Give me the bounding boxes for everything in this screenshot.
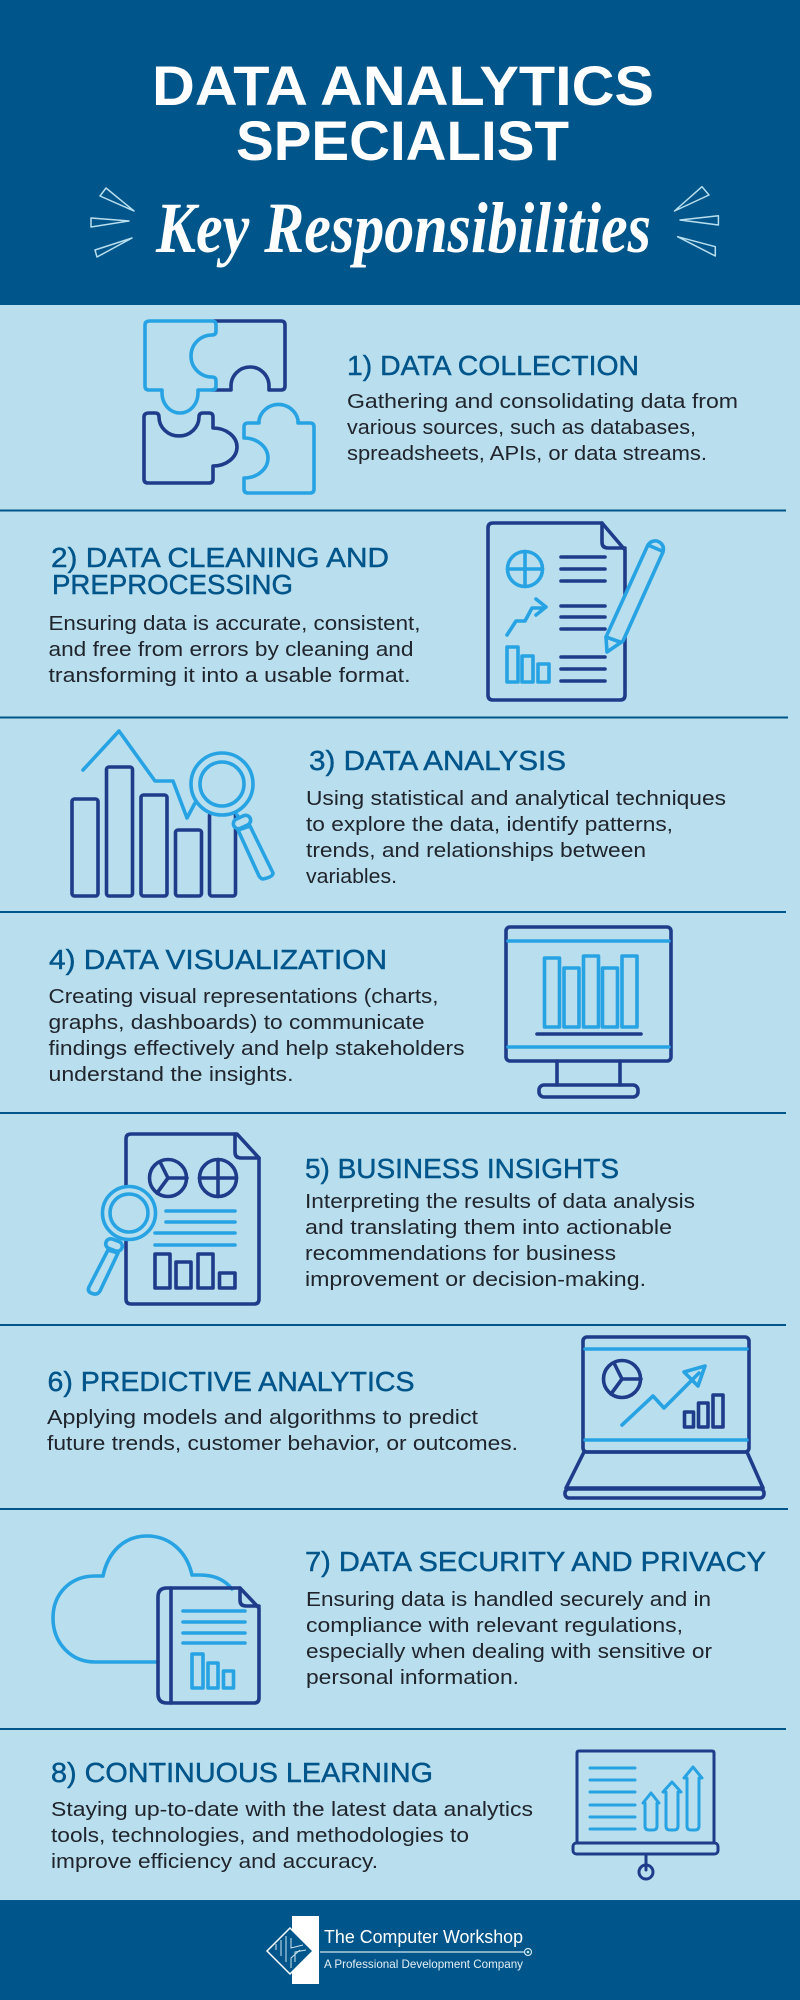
heading: 7) DATA SECURITY AND PRIVACY [305, 1546, 766, 1577]
icon: presentation board with rising arrows [573, 1751, 718, 1879]
heading [51, 542, 389, 600]
text block: future trends, customer behavior, or outcomes. [47, 1433, 518, 1455]
text block: recommendations for business [305, 1243, 616, 1265]
text block: transforming it into a usable format. [48, 665, 410, 687]
heading: 2) DATA CLEANING AND [51, 542, 389, 573]
panel: 8 continuous learning [0, 1728, 800, 1900]
panel: 4 data visualization [0, 911, 800, 1113]
panel: 6 predictive analytics [0, 1324, 800, 1509]
text block: graphs, dashboards) to communicate [48, 1012, 425, 1034]
text block [306, 1589, 712, 1689]
text block: especially when dealing with sensitive or [306, 1641, 712, 1663]
heading: 6) PREDICTIVE ANALYTICS [48, 1366, 414, 1397]
text block [48, 986, 464, 1086]
icon: cloud with document [53, 1536, 259, 1703]
text block: Applying models and algorithms to predict [47, 1407, 479, 1429]
text block [305, 1191, 695, 1291]
panel: 2 data cleaning [0, 510, 800, 717]
logo: The Computer Workshop [267, 1916, 532, 1984]
text block: Interpreting the results of data analysis [305, 1191, 695, 1213]
icon: left sparkle rays [91, 188, 134, 257]
title [152, 54, 654, 172]
text block: improve efficiency and accuracy. [51, 1851, 378, 1873]
heading: 5) BUSINESS INSIGHTS [305, 1153, 619, 1184]
text block: and free from errors by cleaning and [48, 639, 414, 661]
logo: The Computer Workshop: A Professional Development Company [324, 1957, 523, 1971]
text block: spreadsheets, APIs, or data streams. [347, 443, 707, 465]
text block: Ensuring data is accurate, consistent, [48, 613, 420, 635]
heading: 8) CONTINUOUS LEARNING [51, 1757, 433, 1788]
panel: 1 data collection [0, 305, 800, 510]
text block: tools, technologies, and methodologies to [51, 1825, 469, 1847]
icon: document with pencil [488, 523, 663, 700]
text block: trends, and relationships between [306, 840, 646, 862]
footer [0, 1900, 800, 2000]
text block [48, 613, 420, 687]
icon: report with magnifier [88, 1134, 259, 1304]
text block: understand the insights. [48, 1064, 294, 1086]
text block [347, 391, 738, 465]
icon: right sparkle rays [674, 187, 718, 256]
text block: to explore the data, identify patterns, [306, 814, 673, 836]
text block: findings effectively and help stakeholders [48, 1038, 464, 1060]
heading: 1) DATA COLLECTION [347, 350, 639, 381]
text block: Gathering and consolidating data from [347, 391, 738, 413]
panel: 5 business insights [0, 1112, 800, 1325]
text block: Creating visual representations (charts, [48, 986, 438, 1008]
icon: laptop with chart [565, 1337, 764, 1498]
text block: Ensuring data is handled securely and in [306, 1589, 711, 1611]
text block: compliance with relevant regulations, [306, 1615, 683, 1637]
heading: 3) DATA ANALYSIS [309, 745, 566, 776]
logo: The Computer Workshop: The Computer Workshop [324, 1927, 523, 1947]
subtitle: Key Responsibilities [155, 188, 651, 268]
text block: Using statistical and analytical techniques [306, 788, 726, 810]
heading: PREPROCESSING [52, 569, 293, 600]
icon: puzzle pieces [144, 321, 314, 493]
title: DATA ANALYTICS [152, 54, 654, 117]
text block: Staying up-to-date with the latest data analytics [51, 1799, 533, 1821]
text block [306, 788, 726, 888]
heading: 4) DATA VISUALIZATION [49, 944, 387, 975]
text block [51, 1799, 533, 1873]
header banner [0, 0, 800, 305]
text block: personal information. [306, 1667, 519, 1689]
icon: bar chart with magnifier [72, 731, 273, 896]
icon: monitor with chart [506, 927, 671, 1097]
text block: various sources, such as databases, [347, 417, 696, 439]
title: SPECIALIST [236, 109, 569, 172]
panel: 7 data security [0, 1508, 800, 1729]
text block: improvement or decision-making. [305, 1269, 646, 1291]
text block: and translating them into actionable [305, 1217, 672, 1239]
panel: 3 data analysis [0, 716, 800, 912]
text block [47, 1407, 518, 1455]
text block: variables. [306, 866, 397, 888]
